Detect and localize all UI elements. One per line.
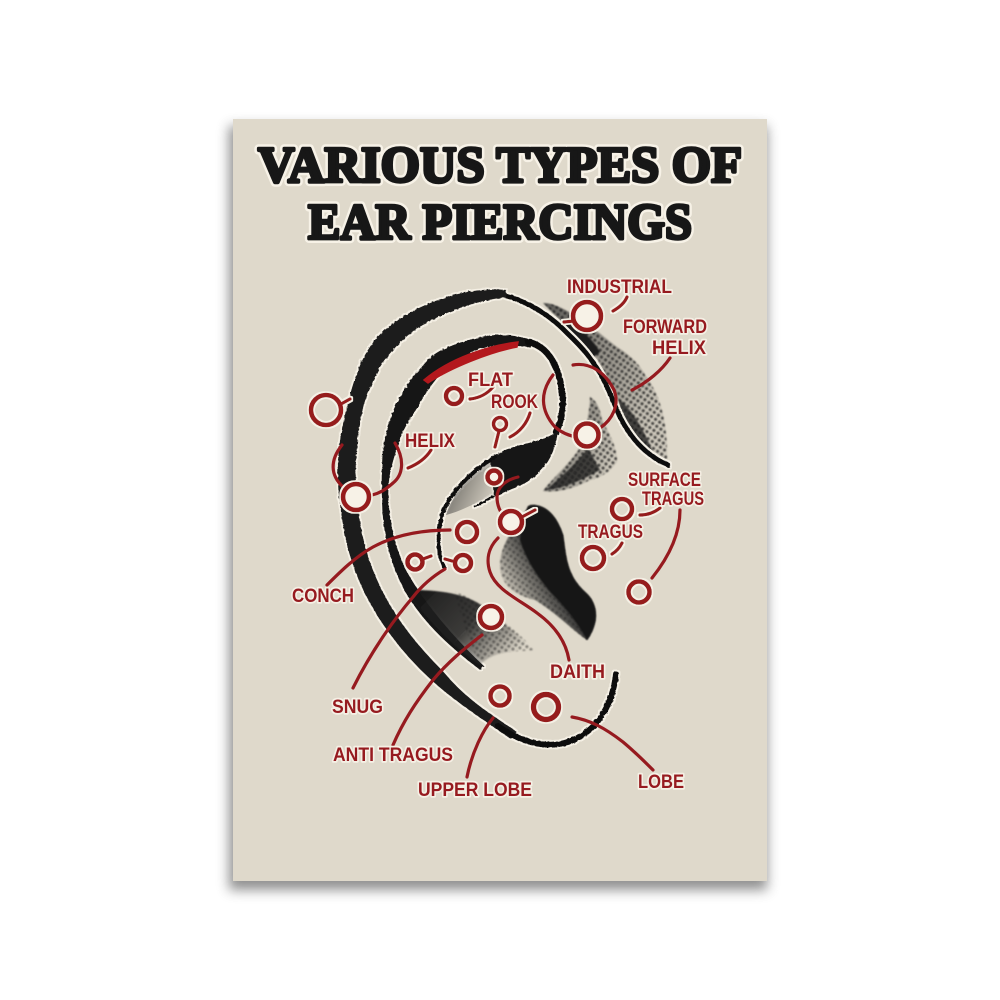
leader: upper lobe (467, 718, 493, 777)
forward helix arc left (543, 375, 577, 437)
tick: flat (470, 387, 493, 399)
tick: tragus (612, 543, 622, 554)
inner helix thick band (382, 336, 533, 669)
antihelix fold line (438, 457, 495, 567)
ring: rook (494, 418, 506, 447)
ring: surface tragus lower (628, 582, 650, 602)
label: snug: SNUG (332, 697, 383, 718)
antitragus shaded shape (412, 590, 535, 665)
antihelix stipple (446, 461, 494, 515)
label: tragus: TRAGUS (578, 522, 643, 543)
ring: helix top (311, 395, 350, 425)
ring: conch (457, 522, 477, 542)
long red leader lines (327, 358, 680, 777)
helix arc right (372, 443, 402, 495)
title: EAR PIERCINGS (308, 195, 692, 251)
red flat bar (424, 342, 518, 383)
label: anti tragus: ANTI TRAGUS (333, 745, 453, 766)
tick: surface tragus (640, 508, 660, 515)
ring: surface tragus (612, 499, 632, 519)
daith ring link (497, 477, 518, 516)
ring: flat (446, 388, 462, 404)
label: tragus right: TRAGUS (642, 489, 704, 510)
title (258, 138, 742, 251)
leader: forward helix (632, 358, 670, 390)
ring: snug (445, 555, 471, 571)
stipple shading behind ear (543, 303, 667, 491)
label: upper lobe: UPPER LOBE (418, 780, 532, 801)
label: conch: CONCH (292, 586, 354, 607)
ring: helix bottom (343, 484, 369, 510)
leader: anti tragus (393, 635, 482, 745)
label: forward: FORWARD (623, 317, 707, 338)
ring: daith (500, 510, 535, 533)
inner helix right line (528, 342, 563, 432)
outer helix thick band (339, 291, 515, 737)
fold tick (474, 496, 494, 507)
outer helix line (490, 293, 668, 465)
label: lobe: LOBE (638, 772, 684, 793)
label: surface: SURFACE (628, 470, 701, 491)
ring: tragus (582, 547, 604, 569)
leader: surface tragus long arc (652, 510, 680, 578)
piercing rings (311, 297, 660, 720)
ring: anti tragus (480, 606, 502, 628)
tick: industrial (613, 297, 627, 311)
tick: helix (408, 450, 431, 468)
ring: upper lobe (490, 686, 510, 706)
helix arc left (333, 445, 343, 487)
leader: lobe (572, 717, 653, 770)
tick: rook (510, 413, 530, 437)
label: rook: ROOK (491, 392, 538, 413)
label: daith: DAITH (550, 662, 605, 683)
title: VARIOUS TYPES OF (258, 138, 742, 194)
tragus shaded shape (500, 505, 596, 640)
label: flat: FLAT (468, 370, 513, 391)
title: EAR PIERCINGS (308, 195, 692, 251)
ring: lobe (534, 694, 558, 720)
lobe curve (498, 674, 616, 745)
forward helix arc right (573, 364, 616, 428)
poster shadow (229, 126, 767, 890)
leader: snug (353, 569, 445, 688)
label: helix right: HELIX (652, 338, 706, 359)
ring: daith upper (488, 470, 500, 484)
ring: snug inner (408, 554, 431, 570)
ring: industrial (564, 302, 601, 330)
label: industrial: INDUSTRIAL (567, 277, 672, 298)
label: helix left: HELIX (405, 431, 455, 452)
ring: forward helix (576, 424, 598, 446)
leader: daith (488, 538, 569, 660)
poster paper (233, 119, 767, 881)
leader: conch (327, 530, 450, 585)
antihelix black shape (490, 431, 558, 497)
title: VARIOUS TYPES OF (258, 138, 742, 194)
ear outline (339, 291, 668, 745)
